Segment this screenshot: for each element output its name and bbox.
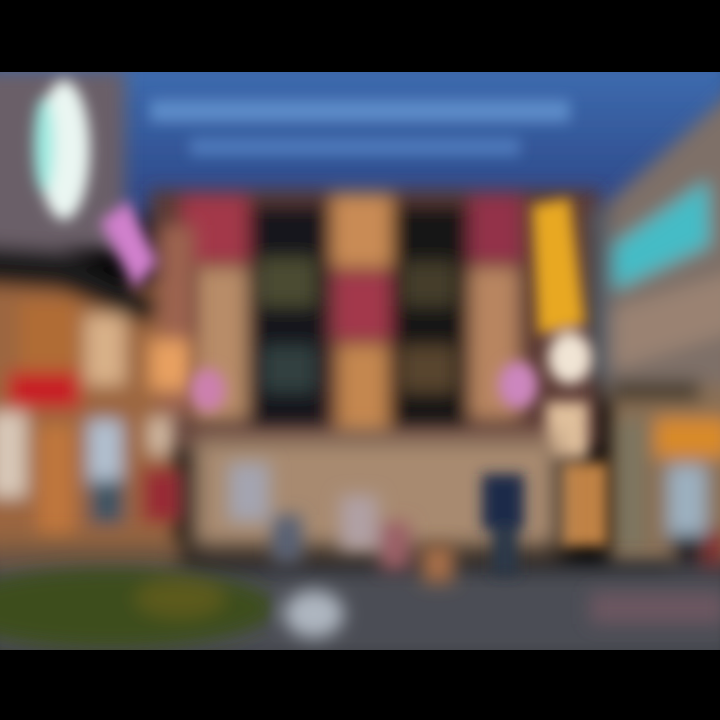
right building (590, 85, 720, 585)
left building (0, 70, 195, 560)
pillars (182, 195, 248, 263)
left white sign (34, 80, 90, 220)
pink sign on left building (100, 200, 158, 290)
sky (0, 50, 720, 220)
main figure in dark clothing (482, 474, 524, 575)
central building facade (150, 190, 600, 450)
ground floor shops and crowd (0, 435, 720, 665)
green shrubs foreground (0, 568, 344, 648)
crowd of shoppers (228, 462, 720, 624)
yellow vertical sign and lights (190, 198, 608, 547)
blurred banner text in sky (150, 100, 570, 156)
dark window columns (250, 205, 328, 430)
